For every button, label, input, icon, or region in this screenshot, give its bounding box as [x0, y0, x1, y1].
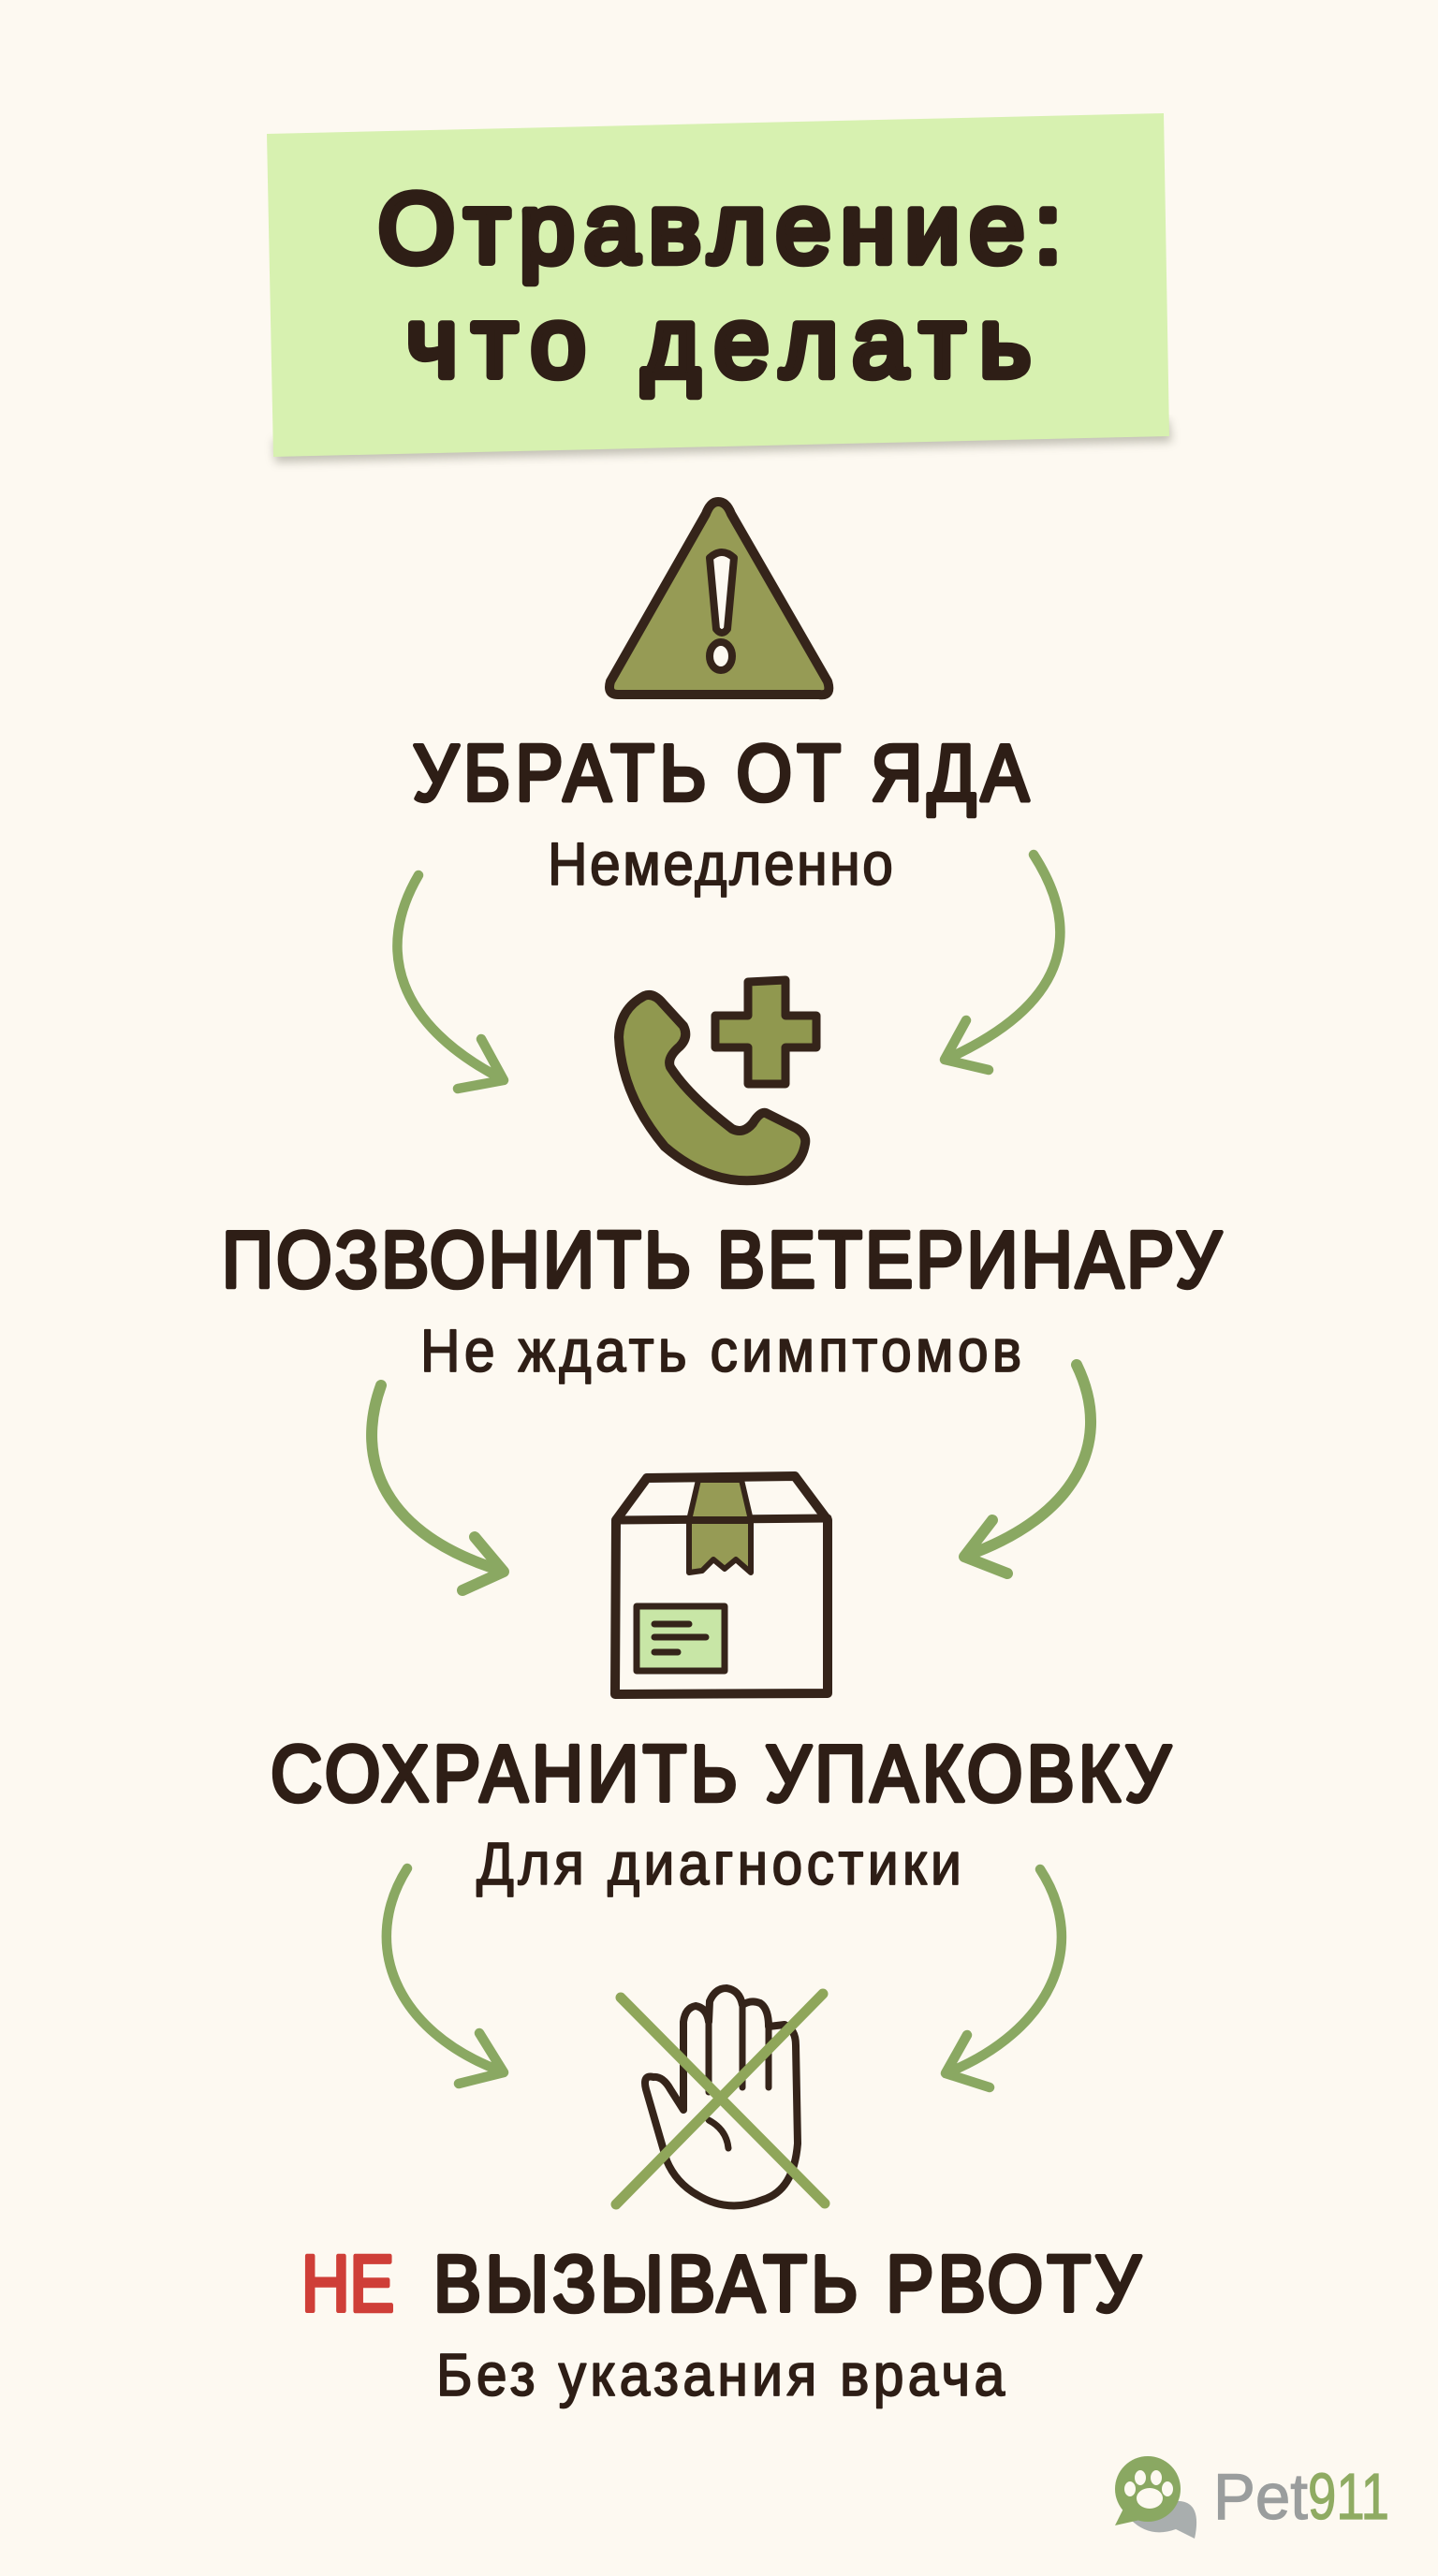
title text: Отравление:	[378, 174, 1062, 284]
heading: step 4: НЕ	[301, 2239, 394, 2328]
paw	[1124, 2470, 1173, 2509]
arrow: step 1 left	[397, 875, 504, 1089]
arrow: step 2 left	[372, 1385, 504, 1590]
arrow: step 2 right	[964, 1365, 1091, 1573]
icon: phone with medical cross	[619, 980, 816, 1180]
heading: step 1: УБРАТЬ ОТ ЯДА	[413, 729, 1029, 818]
title text	[378, 174, 1062, 398]
subtext: step 2: Не ждать симптомов	[420, 1318, 1021, 1385]
title text: что делать	[406, 288, 1031, 398]
shipping label	[637, 1606, 725, 1671]
icon: package box	[615, 1476, 828, 1694]
logo: Pet911: Pet	[1213, 2460, 1308, 2533]
arrow: step 3 right	[946, 1869, 1062, 2087]
subtext: step 3: Для диагностики	[477, 1831, 961, 1898]
arrow: step 3 left	[387, 1868, 504, 2084]
subtext: step 1: Немедленно	[548, 831, 893, 899]
icon: warning triangle	[609, 502, 829, 695]
icon: crossed-out hand	[616, 1988, 825, 2205]
logo: Pet911	[1115, 2456, 1389, 2539]
subtext: step 4: Без указания врача	[436, 2342, 1005, 2409]
logo: Pet911: 911	[1308, 2460, 1389, 2533]
arrow: step 1 right	[945, 855, 1060, 1070]
tape	[689, 1480, 751, 1573]
heading: step 3: СОХРАНИТЬ УПАКОВКУ	[271, 1730, 1171, 1819]
title card	[267, 113, 1172, 462]
heading: step 4: ВЫЗЫВАТЬ РВОТУ	[433, 2240, 1141, 2329]
heading: step 2: ПОЗВОНИТЬ ВЕТЕРИНАРУ	[222, 1216, 1222, 1305]
